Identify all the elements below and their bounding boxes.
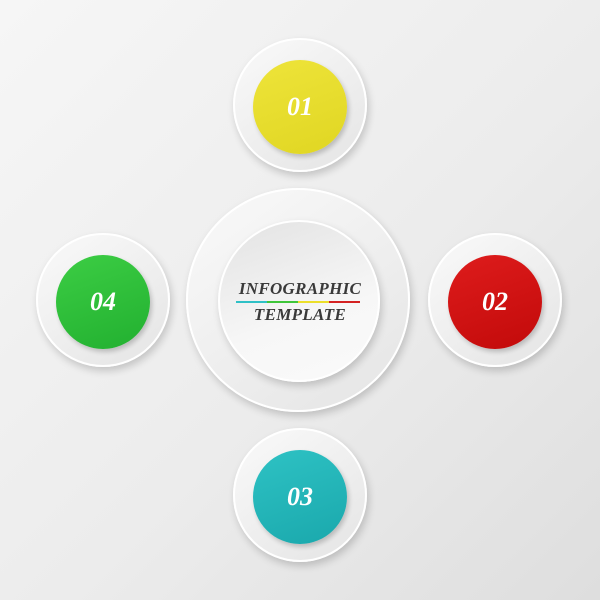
title text: TEMPLATE (254, 305, 346, 324)
item 04 (36, 233, 170, 367)
item 03: 03 (287, 482, 313, 511)
item 04: 04 (90, 287, 116, 316)
item 03 (233, 428, 367, 562)
panel: center circle (186, 188, 410, 412)
item 02 (428, 233, 562, 367)
item 01 (233, 38, 367, 172)
title text: INFOGRAPHIC (239, 279, 361, 298)
title text (236, 279, 361, 324)
item 02: 02 (482, 287, 508, 316)
center inner circle (218, 220, 380, 382)
item 01: 01 (287, 92, 313, 121)
